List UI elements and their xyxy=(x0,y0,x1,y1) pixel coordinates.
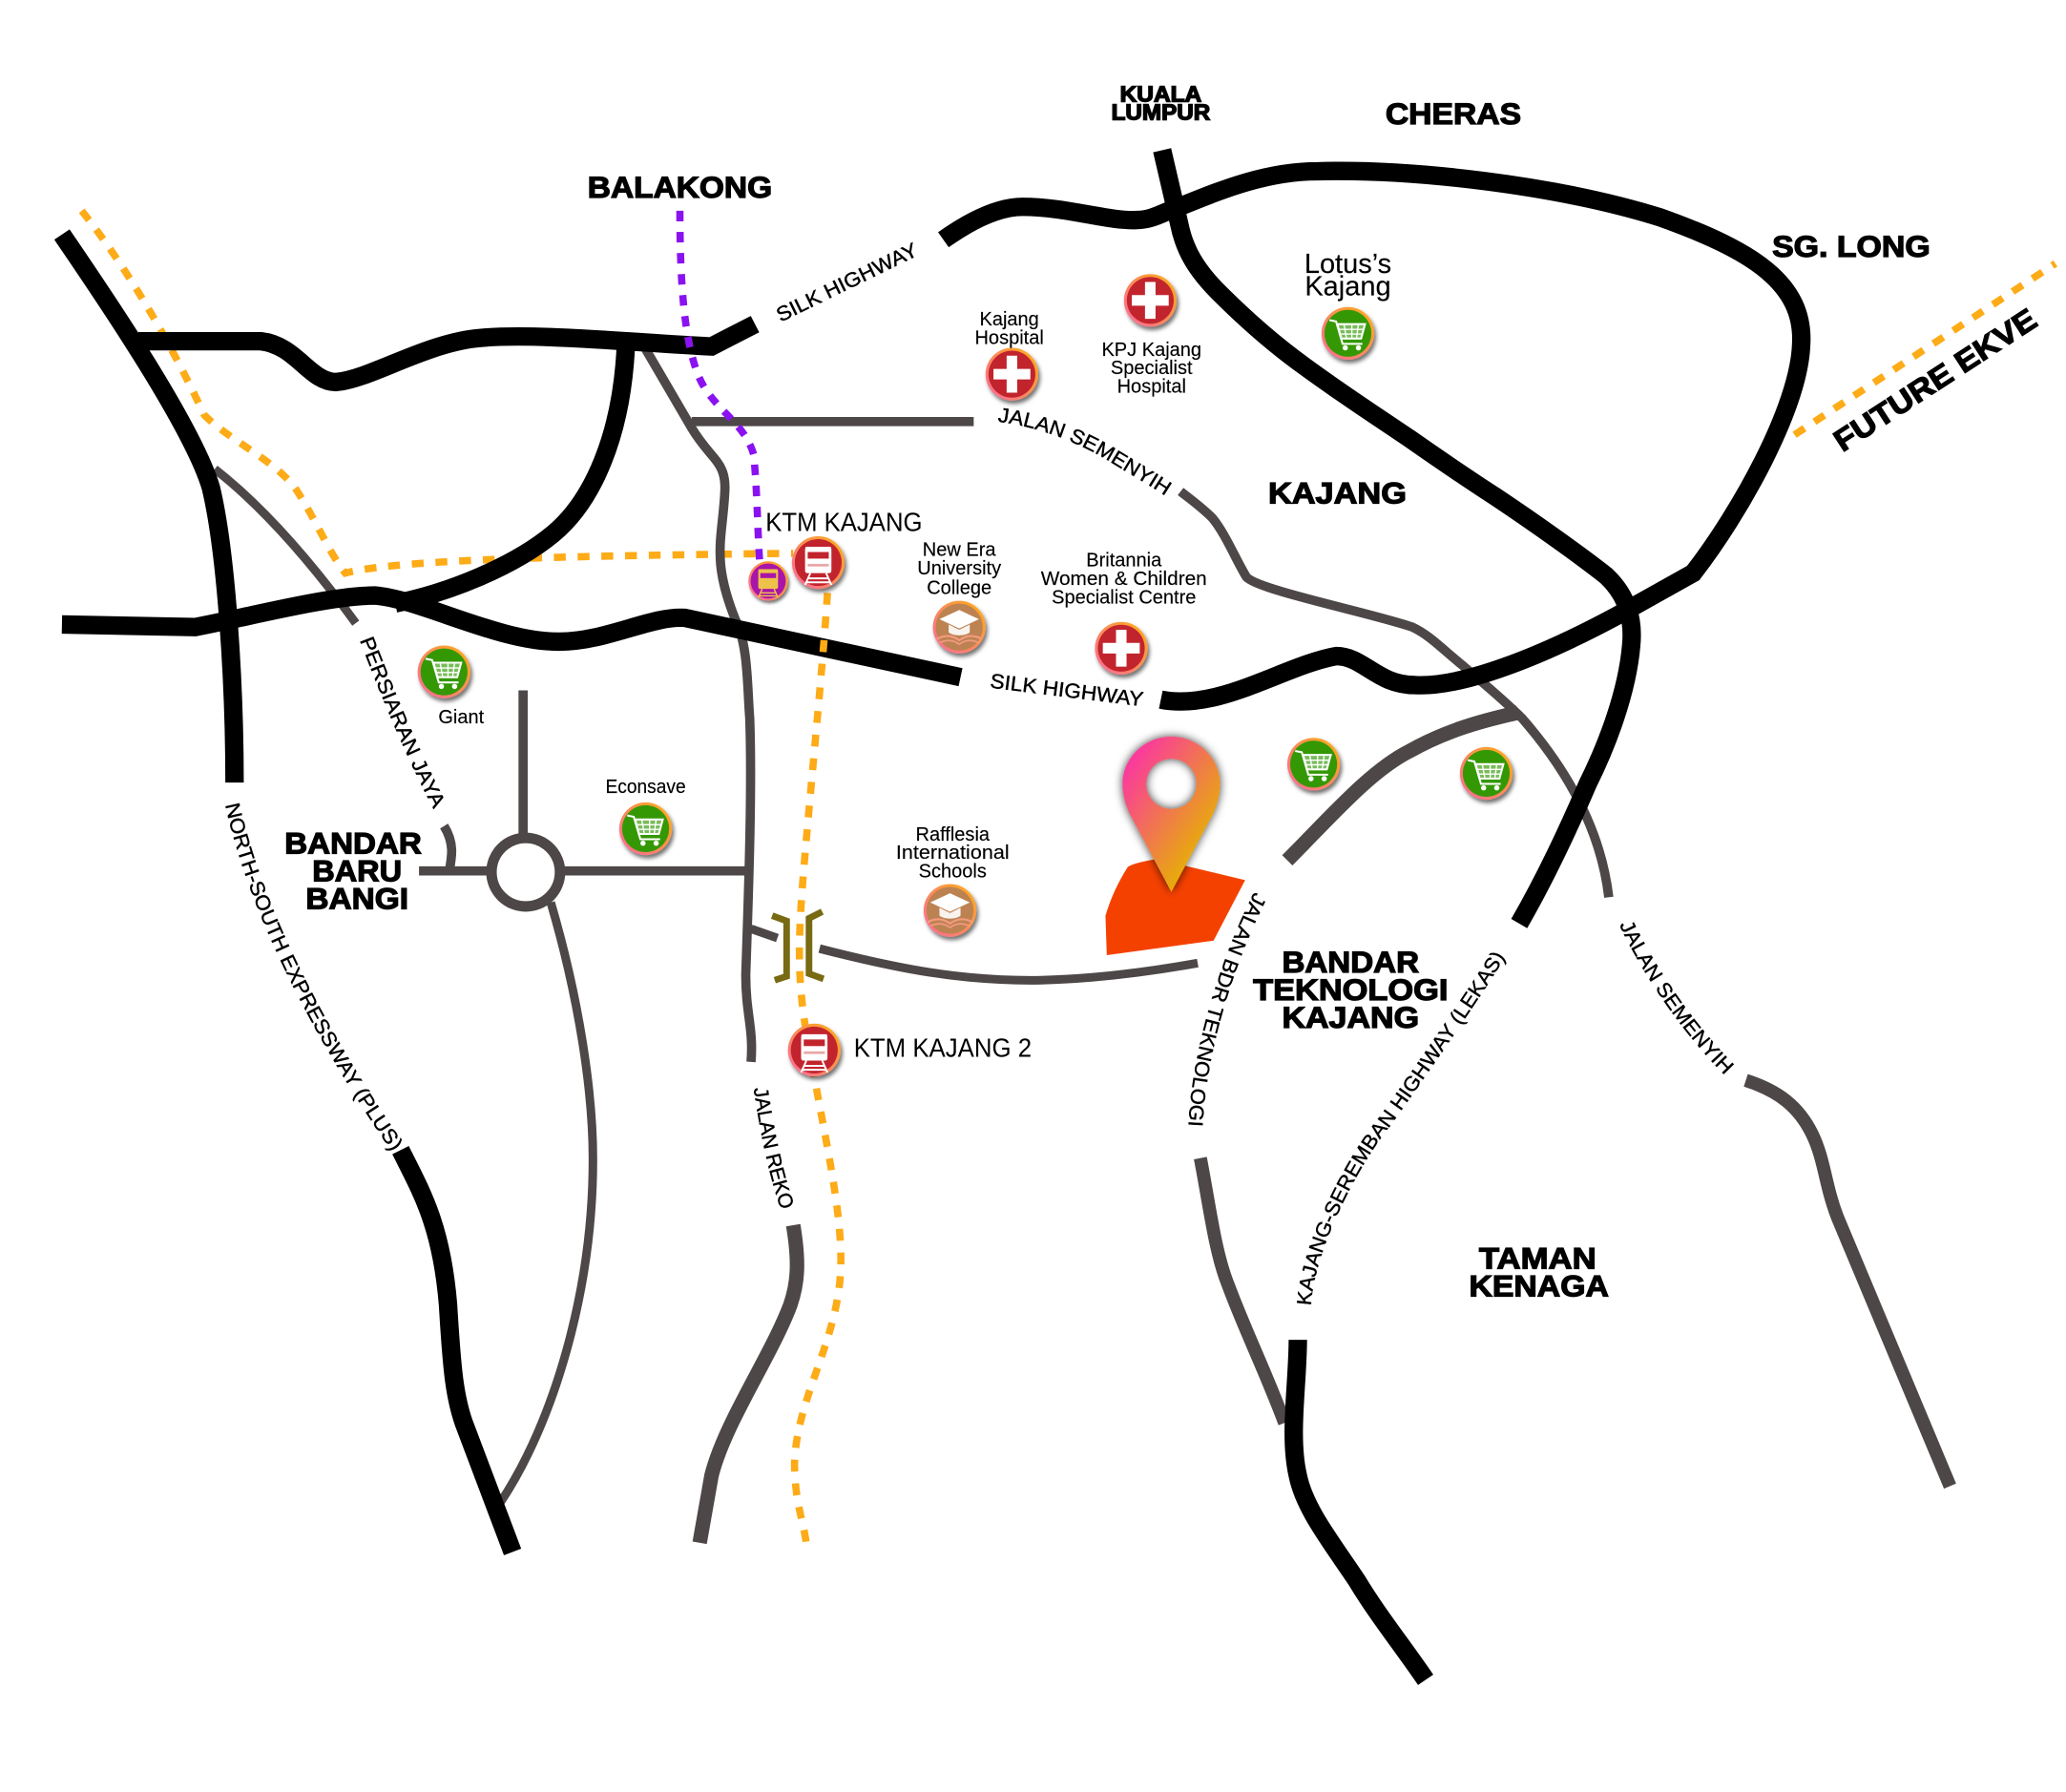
icon: MRT station xyxy=(748,561,788,601)
label: Rafflesia International Schools: International xyxy=(896,843,1010,864)
grey road: north from roundabout xyxy=(520,690,527,841)
grey road: Jalan Semenyih south xyxy=(1745,1080,1950,1486)
icon: Kajang Hospital xyxy=(986,348,1038,401)
road label: Jalan Reko: JALAN REKO xyxy=(754,1088,793,1208)
orange line: Future EKVE xyxy=(1795,263,2056,435)
label: Rafflesia International Schools: Rafflesia xyxy=(916,824,991,845)
place label: Bandar Teknologi Kajang: BANDAR xyxy=(1282,945,1419,979)
label: Rafflesia International Schools: Schools xyxy=(919,862,987,883)
highway: curved connector xyxy=(395,345,626,603)
road label: Jalan Bdr Teknologi: JALAN BDR TEKNOLOGI xyxy=(1188,893,1265,1126)
grey road: west spur to roundabout xyxy=(419,867,490,874)
project site block xyxy=(1105,859,1245,955)
label: Kajang Hospital: Kajang xyxy=(979,309,1039,330)
road label: North-South Expressway: NORTH-SOUTH EXPRESSWAY (PLUS) xyxy=(225,803,402,1151)
grey road: south curve from roundabout xyxy=(501,903,593,1502)
highway: LEKAS north xyxy=(1162,150,1632,924)
icon: Britannia centre xyxy=(1095,622,1148,675)
label: New Era University College: University xyxy=(917,558,1001,579)
grey road: branch east to Jalan Semenyih xyxy=(692,418,973,425)
label: Giant: Giant xyxy=(438,707,485,728)
label: KPJ Kajang Specialist Hospital: KPJ Kajang xyxy=(1101,340,1201,361)
place label: Bandar Baru Bangi: BANDAR xyxy=(284,826,422,861)
roundabout xyxy=(491,838,560,906)
label: New Era University College: New Era xyxy=(923,540,996,561)
label: Kajang Hospital: Hospital xyxy=(974,327,1044,348)
place label: Sg. Long: SG. LONG xyxy=(1772,229,1930,263)
place label: Bandar Teknologi Kajang: KAJANG xyxy=(1282,1000,1419,1034)
icon: KTM Kajang 2 station xyxy=(788,1024,841,1076)
place label: Kajang: KAJANG xyxy=(1268,475,1407,510)
location pin xyxy=(1122,737,1221,892)
place label: Bandar Baru Bangi: BARU xyxy=(312,854,402,888)
place label: Taman Kenaga: KENAGA xyxy=(1470,1269,1609,1303)
label: Econsave: Econsave xyxy=(605,777,686,798)
icon: shopping east 2 xyxy=(1460,747,1513,800)
icon: KTM Kajang station xyxy=(792,536,845,589)
orange rail line: west branch xyxy=(82,211,793,573)
highway: North-South Expressway upper xyxy=(62,235,235,782)
place label: Bandar Teknologi Kajang: TEKNOLOGI xyxy=(1253,972,1448,1007)
highway: western link xyxy=(138,324,755,382)
label: Britannia Women and Children Specialist Centre: Women & Children xyxy=(1041,569,1207,590)
grey road: Persiaran Jaya upper xyxy=(215,469,356,623)
station label: KTM Kajang 2: KTM KAJANG 2 xyxy=(854,1032,1032,1062)
label: Lotus's Kajang: Lotus’s xyxy=(1304,249,1391,280)
highway: Silk Highway west xyxy=(62,595,961,677)
place label: Taman Kenaga: TAMAN xyxy=(1479,1241,1596,1276)
label: Britannia Women and Children Specialist Centre: Specialist Centre xyxy=(1052,587,1196,608)
label: Future EKVE: FUTURE EKVE xyxy=(1827,302,2043,458)
road label: Silk Highway north: SILK HIGHWAY xyxy=(773,239,921,326)
highway: North-South Expressway lower xyxy=(401,1150,512,1552)
grey road: Jalan Bandar Teknologi north xyxy=(1287,713,1518,861)
grey road: bridge road east xyxy=(820,948,1198,980)
grey road: Jalan Bandar Teknologi south xyxy=(1200,1158,1284,1423)
grey road: bridge road west xyxy=(751,928,778,938)
label: KPJ Kajang Specialist Hospital: Hospital xyxy=(1117,376,1186,397)
icon: Econsave shopping xyxy=(619,802,672,855)
place label: Kuala Lumpur: LUMPUR xyxy=(1112,100,1210,125)
road label: Kajang-Seremban Highway: KAJANG-SEREMBAN HIGHWAY (LEKAS) xyxy=(1296,952,1507,1304)
label: Britannia Women and Children Specialist Centre: Britannia xyxy=(1086,551,1162,572)
orange rail line: south xyxy=(795,593,841,1544)
grey road: Persiaran Jaya stub xyxy=(444,826,451,871)
grey road: Jalan Reko north xyxy=(646,349,752,1062)
station label: KTM Kajang: KTM KAJANG xyxy=(765,507,923,536)
icon: KPJ hospital xyxy=(1124,274,1177,326)
icon: shopping east 1 xyxy=(1287,738,1340,790)
place label: Bandar Baru Bangi: BANGI xyxy=(305,882,408,916)
grey road: Jalan Reko south xyxy=(699,1225,797,1543)
label: Lotus's Kajang: Kajang xyxy=(1304,271,1391,302)
place label: Cheras: CHERAS xyxy=(1386,96,1521,131)
road label: Persiaran Jaya: PERSIARAN JAYA xyxy=(360,636,444,809)
road label: Jalan Semenyih south: JALAN SEMENYIH xyxy=(1620,922,1735,1074)
highway: LEKAS south xyxy=(1294,1340,1426,1679)
highway: Silk Highway east and north loop xyxy=(944,171,1802,701)
grey road: Jalan Semenyih xyxy=(1180,491,1609,897)
icon: Rafflesia school xyxy=(924,884,976,937)
grey road: east from roundabout xyxy=(561,867,748,874)
label: KPJ Kajang Specialist Hospital: Specialist xyxy=(1111,358,1193,379)
place label: Balakong: BALAKONG xyxy=(588,170,772,204)
place label: Kuala Lumpur: KUALA xyxy=(1120,81,1201,106)
icon: Lotus's shopping xyxy=(1322,307,1374,360)
purple rail line: Balakong xyxy=(679,211,761,569)
icon: Giant shopping xyxy=(418,646,470,698)
label: New Era University College: College xyxy=(927,578,991,599)
bridge brackets xyxy=(772,911,824,980)
icon: New Era college xyxy=(933,601,986,654)
road label: Jalan Semenyih north: JALAN SEMENYIH xyxy=(998,408,1172,495)
road label: Silk Highway south: SILK HIGHWAY xyxy=(989,670,1145,711)
